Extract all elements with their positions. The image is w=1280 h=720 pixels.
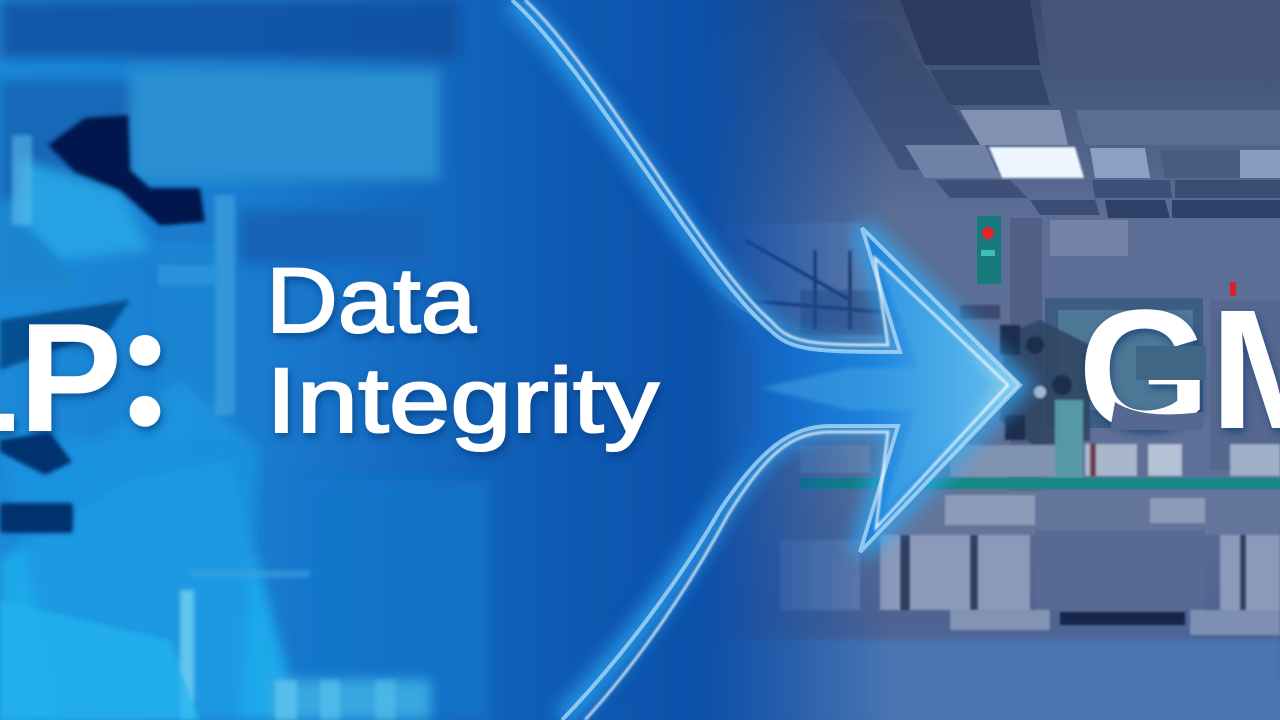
red indicator [1230, 282, 1236, 296]
broken letter overlay [1110, 346, 1206, 430]
word: Integrity: Integrity [266, 350, 659, 452]
floor [760, 639, 1280, 708]
factory photo [660, 0, 1280, 720]
outer light edge [512, 0, 1020, 720]
arrow fill [690, 228, 1020, 555]
text: Data Integrity [266, 250, 659, 452]
word: Data: Data [266, 250, 477, 352]
colon: : [114, 256, 177, 466]
arrow glow [512, 0, 1020, 720]
machine base [780, 490, 1280, 635]
signal light [977, 216, 1001, 284]
green table edge [800, 478, 1280, 489]
arrow [512, 0, 1020, 720]
inner white edge [525, 0, 1008, 720]
machine window [1045, 298, 1203, 428]
letter: G: G [1078, 275, 1210, 465]
lab photo [0, 0, 490, 720]
dark opening [48, 115, 205, 226]
ceiling panels [810, 0, 1280, 218]
ceiling light [989, 147, 1084, 178]
machinery [722, 222, 1280, 478]
title: GM fragment [1078, 275, 1280, 465]
title: LP colon fragment [0, 256, 177, 466]
arrow head inner gloss [760, 258, 992, 515]
wall unit [1050, 220, 1128, 256]
